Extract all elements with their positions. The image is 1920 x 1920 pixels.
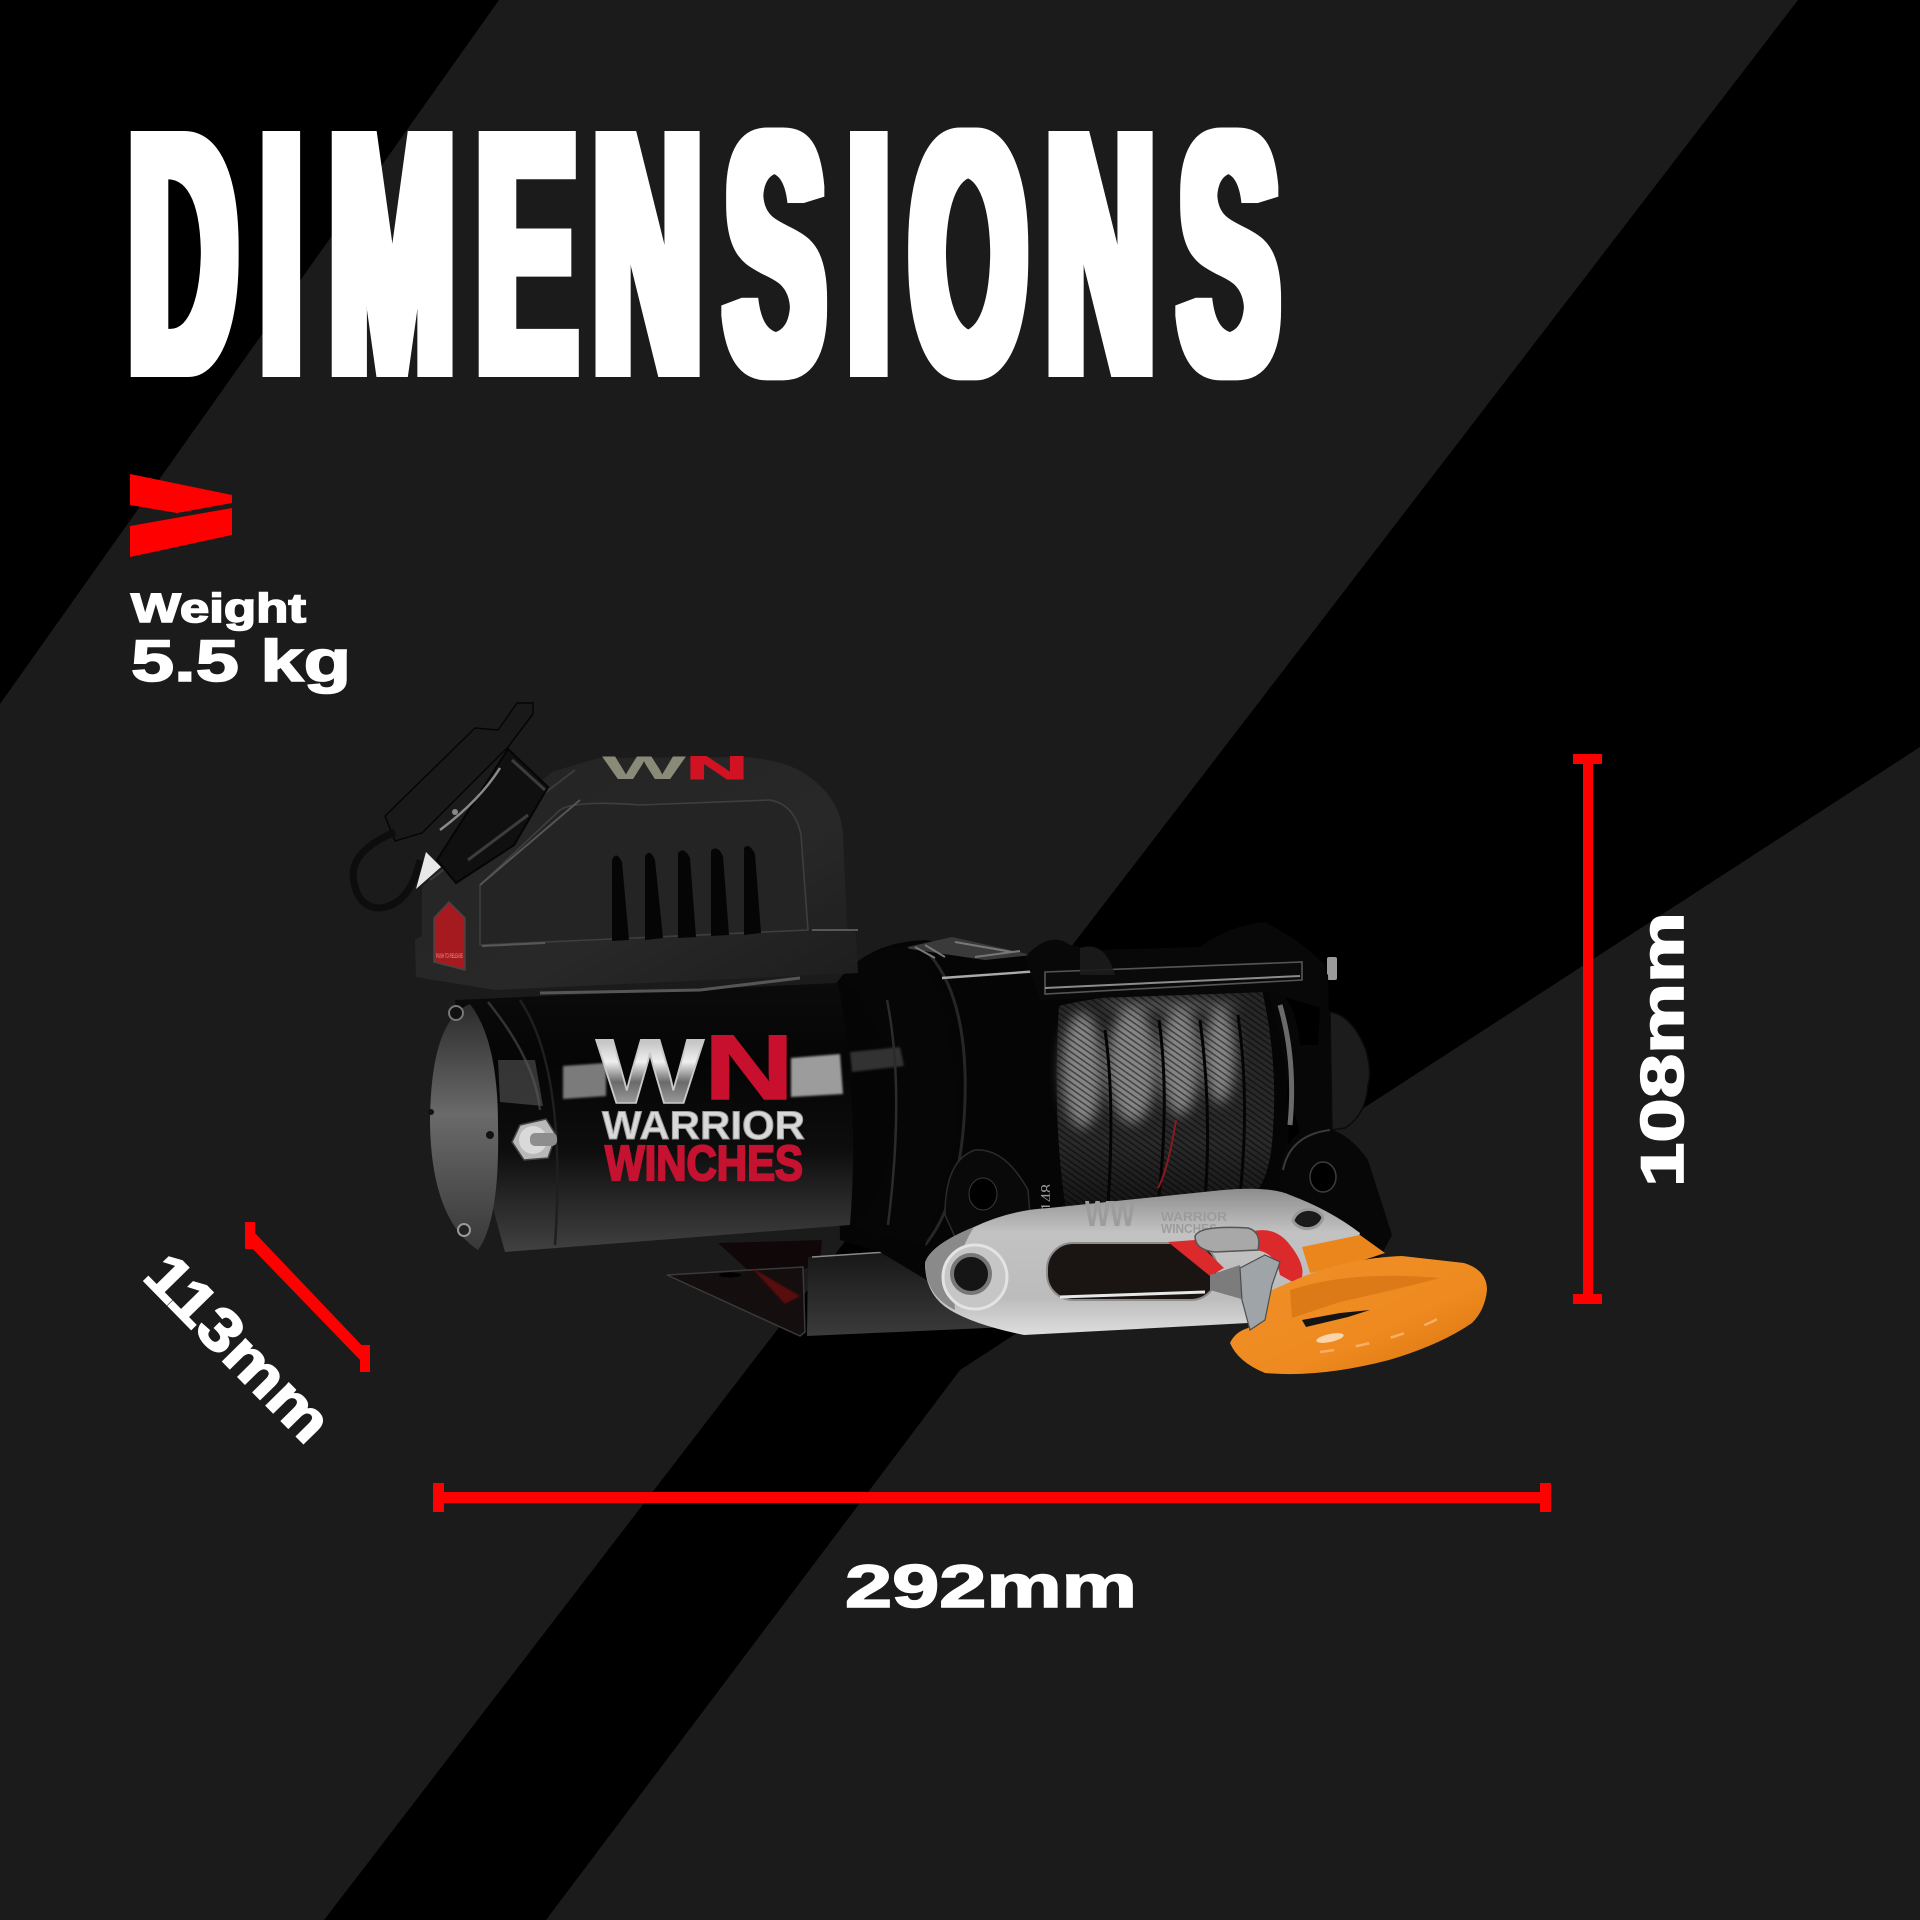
- vent slots: [612, 846, 761, 941]
- thimble and latch: [1195, 1227, 1280, 1330]
- motor logo: WINCHES: [605, 1137, 803, 1191]
- winch product illustration: [353, 703, 1487, 1374]
- motor end cap face: [430, 1004, 498, 1250]
- box top badge: N: [686, 750, 748, 786]
- plug and cover: [353, 703, 548, 908]
- weight block: [131, 585, 351, 694]
- motor logo: N: [704, 1017, 794, 1119]
- weight label: Weight: [131, 585, 306, 631]
- fairlead: WARRIOR: [1161, 1209, 1228, 1224]
- small part number: 148: [1037, 1184, 1057, 1211]
- title: DIMENSIONS: [129, 62, 1279, 446]
- control box: [415, 750, 858, 990]
- red rope: [1168, 1230, 1302, 1285]
- free-spool knob: [1330, 1012, 1370, 1130]
- box top badge: [602, 750, 748, 786]
- depth label: 113mm: [132, 1240, 345, 1455]
- left foot ear: [945, 1150, 1030, 1248]
- tether loop: [353, 832, 420, 908]
- top frame and tie bars: [1025, 922, 1337, 1010]
- weight value: 5.5 kg: [131, 629, 351, 694]
- drum end plate: [1268, 968, 1392, 1265]
- right foot hole and highlights: [1280, 1005, 1336, 1192]
- push to release label: PUSH TO RELEASE: [436, 954, 463, 960]
- motor logo: [596, 1017, 805, 1191]
- motor body: [428, 945, 956, 1252]
- height dimension line: [1573, 754, 1602, 1304]
- motor logo: WARRIOR: [602, 1104, 805, 1148]
- gearbox and ring housing: [835, 937, 1060, 1300]
- orange shackle hook: [1230, 1235, 1487, 1374]
- motor ring segment: [840, 945, 956, 1245]
- width dimension line: [433, 1483, 1551, 1512]
- fairlead: WINCHES: [1161, 1221, 1217, 1236]
- height label: 108mm: [1629, 912, 1696, 1187]
- box top badge: W: [602, 750, 688, 786]
- motor logo: W: [596, 1021, 704, 1123]
- rope drum: [1048, 985, 1290, 1215]
- mounting bracket: [667, 1240, 1030, 1336]
- fairlead: [925, 1189, 1360, 1335]
- width label: 292mm: [845, 1553, 1137, 1620]
- terminal bolt: [512, 1119, 557, 1160]
- depth dimension line: [245, 1222, 370, 1372]
- icon: weight chevron: [130, 474, 232, 557]
- fairlead: WW: [1085, 1193, 1135, 1234]
- push to release label: [434, 902, 465, 970]
